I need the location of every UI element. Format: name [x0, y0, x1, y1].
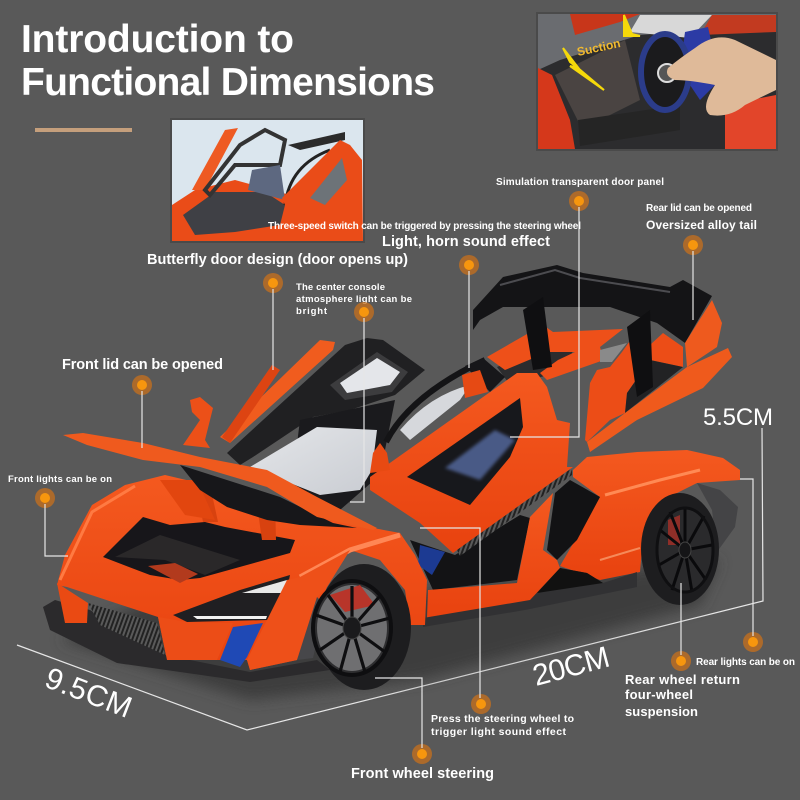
- callout: center console: The center console: [296, 282, 385, 293]
- car: open hood: [63, 433, 377, 530]
- callout: rear lid and tail: [646, 203, 757, 320]
- car: windshield: [250, 427, 377, 495]
- car: rear wheel: [641, 493, 719, 605]
- callout: center console: bright: [296, 306, 328, 317]
- title: [21, 18, 435, 104]
- callout: light and horn: Light, horn sound effect: [382, 234, 550, 250]
- callout: three-speed switch: Three-speed switch can be triggered by pressing the steering wheel: [268, 221, 581, 232]
- dimension: width: 9.5CM: [40, 662, 136, 725]
- callout: light and horn: [382, 234, 550, 368]
- car: nose pillar: [57, 583, 88, 623]
- car: headlight: [173, 575, 290, 622]
- car: splitter: [43, 600, 330, 682]
- car: fender inner: [297, 597, 325, 660]
- callout: transparent door panel: Simulation transparent door panel: [496, 177, 664, 188]
- callout: rear lights: [696, 479, 795, 668]
- title: Functional Dimensions: [21, 61, 435, 104]
- dimension axes: [17, 428, 763, 730]
- callout: press steering wheel: [420, 528, 574, 738]
- callout: rear wheel suspension: four-wheel: [625, 687, 693, 702]
- inset photo: steering wheel with hand: [537, 13, 777, 150]
- callout: rear lights: Rear lights can be on: [696, 657, 795, 668]
- callout: butterfly door: Butterfly door design (door opens up): [147, 252, 408, 268]
- callout: center console: atmosphere light can be: [296, 294, 412, 305]
- car: front wheel: [312, 564, 411, 690]
- callout: press steering wheel: trigger light sound effect: [431, 726, 566, 738]
- callout: rear lid and tail: Oversized alloy tail: [646, 218, 757, 232]
- car: rear quarter panel: [547, 450, 740, 580]
- car: left butterfly door frame: [220, 338, 425, 465]
- car: grille: [88, 603, 165, 655]
- callout: front lights: Front lights can be on: [8, 474, 112, 485]
- callout: front lights: [8, 474, 112, 556]
- callout: front lid: Front lid can be opened: [62, 357, 223, 373]
- car: open rear lid: [487, 297, 732, 452]
- car: [43, 265, 740, 690]
- ground shadow: [60, 560, 720, 700]
- dimension: height: 5.5CM: [703, 404, 773, 431]
- car: front trunk cavity: [103, 517, 295, 580]
- callout: rear wheel suspension: [625, 583, 740, 719]
- callout: front wheel steering: [351, 678, 494, 782]
- car: mirror: [183, 397, 213, 448]
- title: Introduction to: [21, 18, 294, 61]
- callout: front lid: [62, 357, 223, 448]
- car: cabin interior behind windshield: [290, 400, 395, 510]
- callout: rear lid and tail: Rear lid can be opened: [646, 203, 752, 214]
- car: front fender: [247, 550, 350, 670]
- inset photo: steering wheel with hand: Suction: [576, 36, 622, 59]
- dimension: length: 20CM: [529, 641, 613, 693]
- callout: butterfly door: [147, 252, 408, 370]
- callout: transparent door panel: [496, 177, 664, 437]
- car: hood struts: [195, 478, 276, 540]
- callout: rear wheel suspension: suspension: [625, 704, 698, 719]
- car: front bumper: [158, 617, 233, 660]
- car: side door and sill: [410, 493, 637, 627]
- car: blue intake: [220, 623, 263, 667]
- inset photo: butterfly doors: [171, 119, 364, 242]
- car: rear wing: [473, 265, 722, 367]
- callout: rear wheel suspension: Rear wheel return: [625, 672, 740, 687]
- car: right gull door: [370, 358, 573, 556]
- accent bar under title: [35, 128, 132, 132]
- callout: front wheel steering: Front wheel steering: [351, 766, 494, 782]
- callout: center console: [296, 282, 412, 502]
- car: front nose body: [57, 475, 427, 670]
- callout: press steering wheel: Press the steering wheel to: [431, 713, 574, 725]
